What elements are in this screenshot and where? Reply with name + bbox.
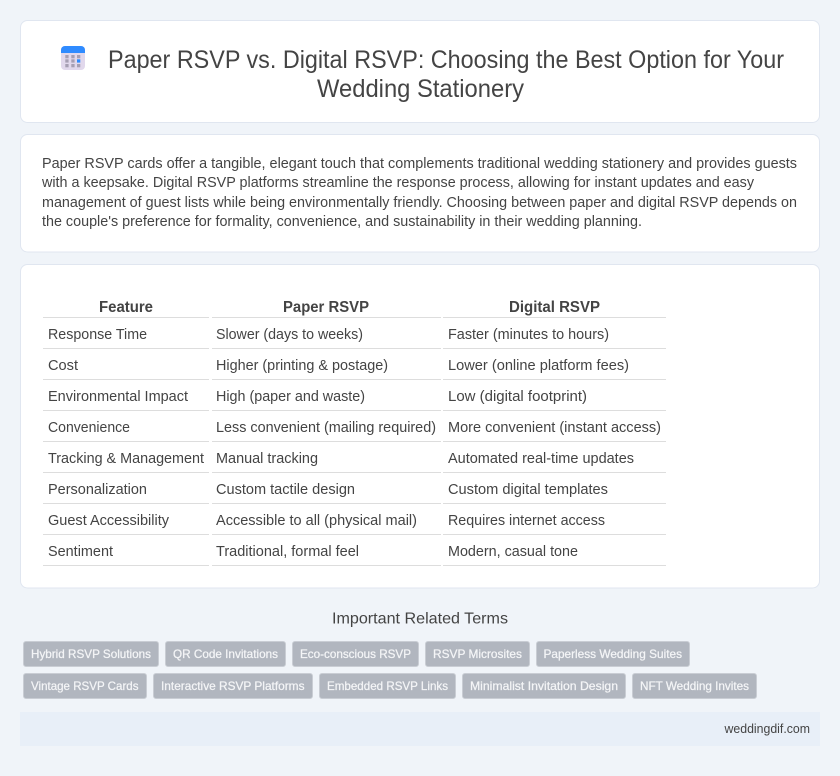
tag: RSVP Microsites [433,647,522,661]
panel: introduction [20,134,820,252]
row: cost [48,358,629,374]
tag [24,642,158,666]
row: guest accessibility: Guest Accessibility [48,513,170,529]
footer [20,712,820,746]
tag [154,674,312,698]
row: sentiment [48,544,578,560]
tag: Vintage RSVP Cards [31,679,138,693]
row: personalization: Custom digital templates [448,482,608,498]
row: guest accessibility [48,513,605,529]
panel: header [20,20,820,122]
tag [536,642,690,666]
tag [166,642,286,666]
panel: related term tags [24,642,756,698]
row: sentiment: Sentiment [48,544,113,560]
row: cost: Higher (printing & postage) [216,358,388,374]
tag: Embedded RSVP Links [327,679,448,693]
tag [292,642,418,666]
row: environmental impact [48,389,587,405]
row: convenience: Convenience [48,420,130,436]
row: response time [48,327,609,343]
tag: Interactive RSVP Platforms [161,679,304,693]
text block: introduction paragraph: with a keepsake. Digital RSVP platforms streamline the response process, allowing for instant updates and easy [41,175,755,191]
row: convenience [48,420,661,436]
tag [426,642,530,666]
row: environmental impact: Low (digital footprint) [448,389,587,405]
row: sentiment: Traditional, formal feel [216,544,359,560]
tag: QR Code Invitations [173,647,278,661]
tag: NFT Wedding Invites [640,679,749,693]
table header row: Paper RSVP [283,299,369,316]
row: environmental impact: Environmental Impact [48,389,188,405]
table header row: Feature [99,299,153,316]
row: personalization [48,482,608,498]
row: personalization: Personalization [48,482,147,498]
title [108,46,784,103]
text block: introduction paragraph [41,156,797,230]
footer: weddingdif.com [724,722,810,736]
row: tracking and management: Tracking & Management [48,451,204,467]
panel: comparison table [20,264,820,588]
row: response time: Faster (minutes to hours) [448,327,609,343]
row: guest accessibility: Requires internet access [448,513,605,529]
tag: Minimalist Invitation Design [470,679,618,693]
tag: Paperless Wedding Suites [544,647,682,661]
row: tracking and management: Automated real-time updates [448,451,634,467]
tag: Eco-conscious RSVP [300,647,411,661]
text block: introduction paragraph: Paper RSVP cards offer a tangible, elegant touch that complements traditional wedding stationery and provides guests [42,156,797,172]
text block: introduction paragraph: management of guest lists while being environmentally friendly. Choosing between paper and digital RSVP depends on [42,195,797,211]
row: guest accessibility: Accessible to all (physical mail) [216,513,417,529]
text block: introduction paragraph: the couple's preference for formality, convenience, and sustainability in their wedding planning. [42,214,642,230]
tag [632,674,756,698]
row: tracking and management [48,451,634,467]
row: environmental impact: High (paper and waste) [216,389,365,405]
heading: important related terms: Important Related Terms [332,610,508,628]
row: convenience: More convenient (instant access) [448,420,661,436]
row: convenience: Less convenient (mailing required) [216,420,436,436]
row: response time: Slower (days to weeks) [216,327,363,343]
row: sentiment: Modern, casual tone [448,544,578,560]
title: Paper RSVP vs. Digital RSVP: Choosing the Best Option for Your [108,46,784,74]
icon: calendar [61,46,85,70]
tag [24,674,146,698]
row: tracking and management: Manual tracking [216,451,318,467]
tag [320,674,456,698]
table header row: Digital RSVP [509,299,600,316]
row: personalization: Custom tactile design [216,482,355,498]
table header row [99,299,600,316]
row: cost: Lower (online platform fees) [448,358,629,374]
title: Wedding Stationery [317,75,524,103]
row: response time: Response Time [48,327,147,343]
tag: Hybrid RSVP Solutions [31,647,151,661]
row: cost: Cost [48,358,78,374]
tag [462,674,626,698]
